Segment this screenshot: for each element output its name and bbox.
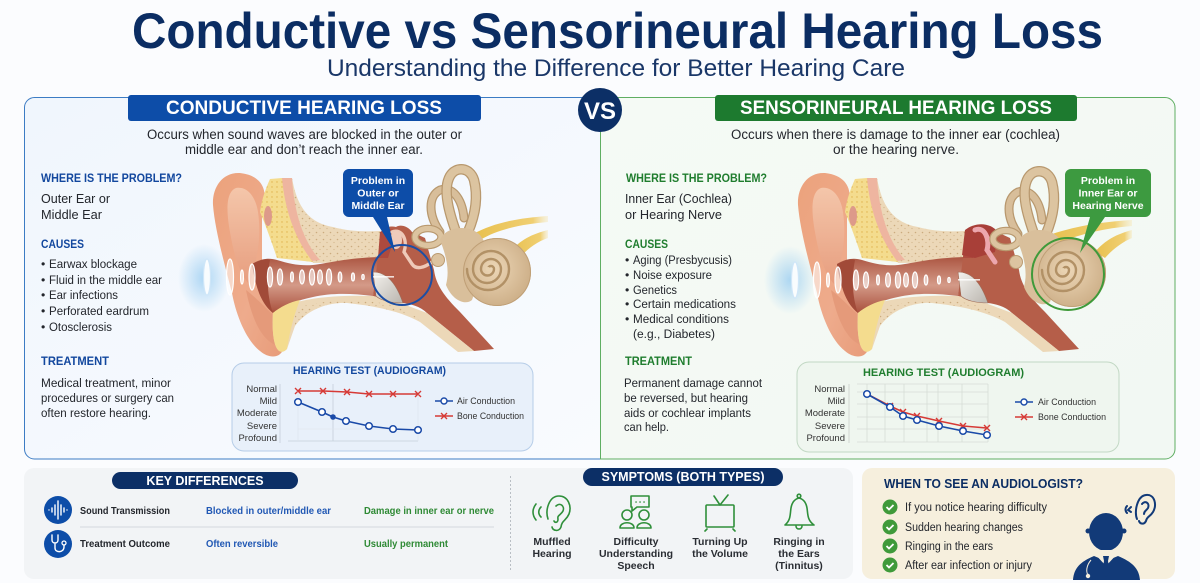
chart: audiogram, conductive: Moderate xyxy=(237,408,277,419)
list: causes, conductive: • xyxy=(41,304,45,318)
icon: sound wave xyxy=(44,496,72,524)
list: causes, conductive: • xyxy=(41,257,45,271)
symptom: difficulty understanding speech: Understanding xyxy=(599,548,673,560)
chart: audiogram, sensorineural: HEARING TEST (AUDIOGRAM) xyxy=(863,367,1024,379)
heading: sensorineural: SENSORINEURAL HEARING LOSS xyxy=(740,98,1052,119)
heading: symptoms: SYMPTOMS (BOTH TYPES) xyxy=(602,470,764,484)
chart: audiogram, sensorineural: Bone Conduction xyxy=(1038,412,1106,423)
chart: audiogram, conductive: HEARING TEST (AUDIOGRAM) xyxy=(293,365,446,377)
chart: audiogram, conductive: Bone Conduction xyxy=(457,411,524,422)
chart: audiogram, sensorineural: Mild xyxy=(828,396,845,407)
heading: when to see an audiologist: WHEN TO SEE AN AUDIOLOGIST? xyxy=(884,476,1083,491)
symptom: muffled hearing: Hearing xyxy=(532,548,572,560)
sound waves xyxy=(792,262,950,298)
list: causes, conductive: Otosclerosis xyxy=(49,320,112,334)
heading: symptoms xyxy=(583,468,783,486)
chart: audiogram, sensorineural: Normal xyxy=(814,384,845,395)
text: where is the problem, sensorineural: or Hearing Nerve xyxy=(625,207,722,222)
list: causes, sensorineural xyxy=(625,239,736,341)
text: where is the problem, sensorineural xyxy=(625,173,767,222)
list: causes, conductive: • xyxy=(41,288,45,302)
text: where is the problem, conductive: WHERE IS THE PROBLEM? xyxy=(41,173,182,185)
list: causes, sensorineural: • xyxy=(625,297,629,311)
callout: problem in outer or middle ear: Middle Ear xyxy=(351,200,405,212)
text: treatment, conductive: often restore hearing. xyxy=(41,406,151,420)
chart: audiogram, conductive: Severe xyxy=(247,421,277,432)
symptom: ringing in the ears: the Ears xyxy=(778,548,820,560)
description: sensorineural: Occurs when there is damage to the inner ear (cochlea) xyxy=(731,127,1060,142)
description: conductive: middle ear and don’t reach the inner ear. xyxy=(185,142,423,157)
list: causes, conductive xyxy=(41,239,162,334)
panel: when to see an audiologist xyxy=(862,468,1175,580)
symptom: difficulty understanding speech: Difficulty xyxy=(614,536,659,548)
heading: key differences xyxy=(112,472,298,489)
illustration: ear anatomy with middle ear problem xyxy=(178,169,548,356)
description: conductive xyxy=(147,127,462,157)
callout: problem in inner ear or hearing nerve: Inner Ear or xyxy=(1079,188,1137,200)
vs badge: VS xyxy=(584,98,616,125)
text: treatment, sensorineural: can help. xyxy=(624,420,669,434)
text: treatment, conductive xyxy=(41,356,174,420)
callout: problem in inner ear or hearing nerve: Problem in xyxy=(1081,175,1135,187)
icon: stethoscope xyxy=(44,530,72,558)
icon: ear with sound xyxy=(1126,495,1155,524)
text: where is the problem, sensorineural: WHERE IS THE PROBLEM? xyxy=(626,173,767,185)
list: causes, conductive: • xyxy=(41,320,45,334)
chart: audiogram, sensorineural: Profound xyxy=(806,433,845,444)
chart: audiogram, sensorineural: Air Conduction xyxy=(1038,397,1096,408)
heading: conductive: CONDUCTIVE HEARING LOSS xyxy=(166,98,442,119)
symptom: ringing in the ears: (Tinnitus) xyxy=(775,560,823,572)
list: causes, sensorineural: CAUSES xyxy=(625,239,668,251)
callout: problem in outer or middle ear xyxy=(343,169,413,252)
text: treatment, sensorineural: Permanent damage cannot xyxy=(624,376,763,390)
description: sensorineural: or the hearing nerve. xyxy=(833,142,959,157)
text: where is the problem, sensorineural: Inner Ear (Cochlea) xyxy=(625,191,732,206)
list: causes, conductive: CAUSES xyxy=(41,239,84,251)
row: treatment outcome xyxy=(44,530,448,558)
row: treatment outcome: Treatment Outcome xyxy=(80,538,170,550)
subtitle: Understanding the Difference for Better Hearing Care xyxy=(327,55,905,82)
icon: bell xyxy=(785,494,814,529)
checklist: After ear infection or injury xyxy=(905,560,1032,572)
text: where is the problem, conductive xyxy=(41,173,182,222)
description: sensorineural xyxy=(731,127,1060,157)
list: causes, sensorineural: • xyxy=(625,253,629,267)
row: sound transmission xyxy=(44,496,494,524)
symptom: ringing in the ears xyxy=(773,494,825,572)
checklist: Ringing in the ears xyxy=(905,541,993,553)
problem highlight circle xyxy=(372,245,432,305)
panel: conductive hearing loss xyxy=(24,95,600,459)
callout: problem in inner ear or hearing nerve: Hearing Nerve xyxy=(1072,200,1144,212)
list: causes, conductive: Fluid in the middle ear xyxy=(49,273,162,287)
description: conductive: Occurs when sound waves are blocked in the outer or xyxy=(147,127,462,142)
icon: television xyxy=(705,495,735,531)
sound waves xyxy=(204,259,364,295)
chart: audiogram, conductive: Air Conduction xyxy=(457,396,515,407)
list: causes, conductive: • xyxy=(41,273,45,287)
main title: Conductive vs Sensorineural Hearing Loss xyxy=(132,3,1103,59)
list: causes, sensorineural: Aging (Presbycusis) xyxy=(633,253,732,267)
symptom: turning up the volume: Turning Up xyxy=(692,536,748,548)
list: causes, sensorineural: Certain medications xyxy=(633,297,736,311)
heading: conductive xyxy=(128,95,481,121)
callout: problem in outer or middle ear: Problem in xyxy=(351,175,405,187)
symptom: muffled hearing xyxy=(532,496,572,560)
text: treatment, sensorineural xyxy=(624,356,763,434)
row: treatment outcome: Often reversible xyxy=(206,538,278,550)
row: sound transmission: Sound Transmission xyxy=(80,505,170,517)
panel: key differences and symptoms xyxy=(24,468,853,579)
panel: sensorineural hearing loss xyxy=(600,95,1175,459)
problem highlight circle xyxy=(1032,238,1104,310)
row: sound transmission: Blocked in outer/middle ear xyxy=(206,505,331,517)
text: treatment, conductive: TREATMENT xyxy=(41,356,109,368)
list: causes, sensorineural: (e.g., Diabetes) xyxy=(633,327,715,341)
chart: audiogram, sensorineural xyxy=(797,362,1119,452)
text: treatment, conductive: Medical treatment, minor xyxy=(41,376,171,390)
icon: ear xyxy=(533,496,570,530)
text: treatment, sensorineural: be reversed, but hearing xyxy=(624,391,748,405)
symptom: ringing in the ears: Ringing in xyxy=(773,536,825,548)
chart: audiogram, conductive: Profound xyxy=(238,433,277,444)
list: causes, sensorineural: • xyxy=(625,283,629,297)
symptom: difficulty understanding speech xyxy=(599,496,673,572)
illustration: ear anatomy with inner ear problem xyxy=(764,169,1151,356)
text: where is the problem, conductive: Middle Ear xyxy=(41,207,103,222)
list: causes, conductive: Perforated eardrum xyxy=(49,304,149,318)
symptom: muffled hearing: Muffled xyxy=(533,536,571,548)
row: treatment outcome: Usually permanent xyxy=(364,538,448,550)
symptom: turning up the volume xyxy=(692,495,748,560)
list: causes, conductive: Ear infections xyxy=(49,288,118,302)
list: causes, sensorineural: Noise exposure xyxy=(633,268,712,282)
chart: audiogram, conductive xyxy=(232,363,533,451)
checklist: Sudden hearing changes xyxy=(905,522,1023,534)
list: causes, sensorineural: Genetics xyxy=(633,283,677,297)
text: treatment, sensorineural: TREATMENT xyxy=(625,356,692,368)
list: causes, conductive: Earwax blockage xyxy=(49,257,137,271)
symptom: turning up the volume: the Volume xyxy=(692,548,748,560)
icon: audiologist silhouette xyxy=(1073,513,1140,580)
checklist: If you notice hearing difficulty xyxy=(905,502,1047,514)
symptom: difficulty understanding speech: Speech xyxy=(617,560,655,572)
callout: problem in inner ear or hearing nerve xyxy=(1065,169,1151,253)
chart: audiogram, sensorineural: Moderate xyxy=(805,408,845,419)
vs badge xyxy=(578,88,622,132)
chart: audiogram, sensorineural: Severe xyxy=(815,421,845,432)
callout: problem in outer or middle ear: Outer or xyxy=(357,188,399,200)
text: treatment, sensorineural: aids or cochlear implants xyxy=(624,406,751,420)
icon: two people with speech bubble xyxy=(620,496,651,528)
row: sound transmission: Damage in inner ear or nerve xyxy=(364,505,494,517)
text: treatment, conductive: procedures or surgery can xyxy=(41,391,174,405)
heading: key differences: KEY DIFFERENCES xyxy=(146,474,264,488)
chart: audiogram, conductive: Normal xyxy=(246,384,277,395)
text: where is the problem, conductive: Outer Ear or xyxy=(41,191,111,206)
list: causes, sensorineural: • xyxy=(625,312,629,326)
checklist xyxy=(882,500,1047,572)
list: causes, sensorineural: Medical conditions xyxy=(633,312,729,326)
list: causes, sensorineural: • xyxy=(625,268,629,282)
chart: audiogram, conductive: Mild xyxy=(260,396,277,407)
